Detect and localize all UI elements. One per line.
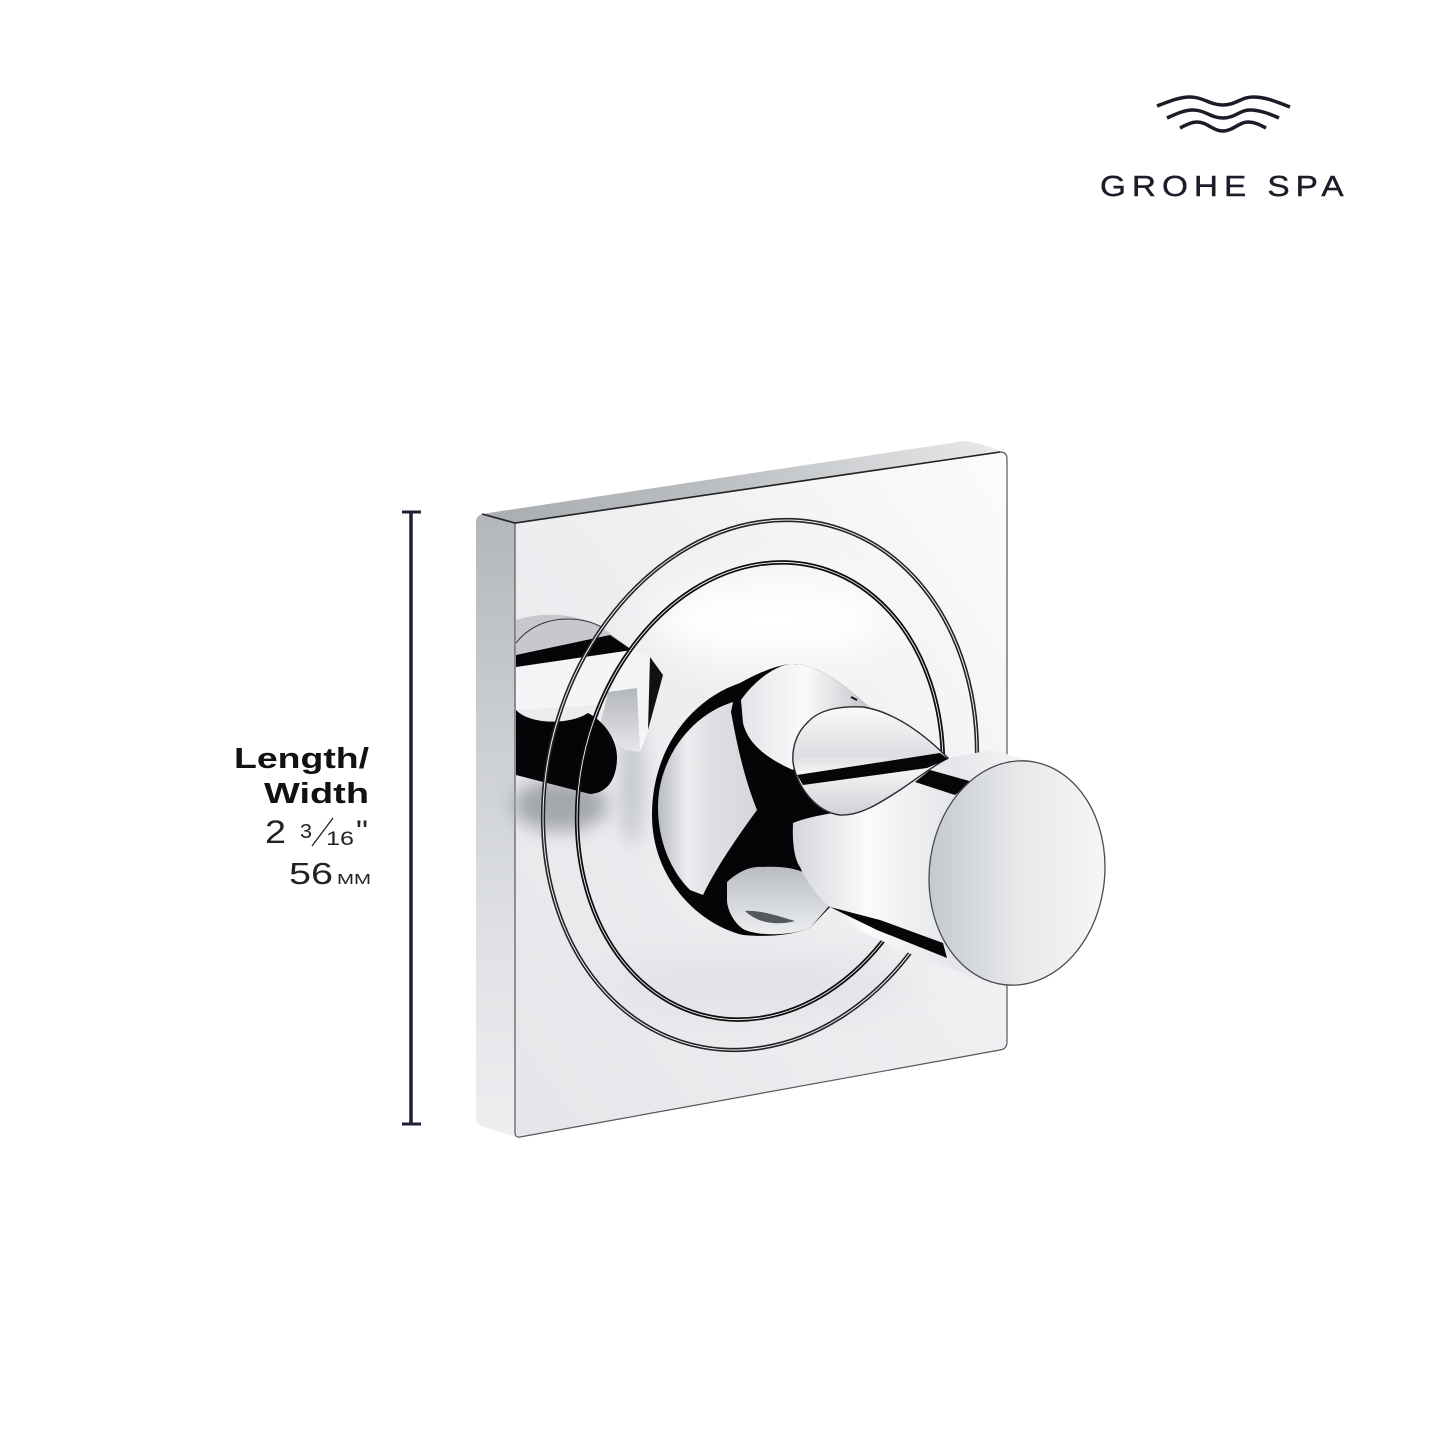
- plate edge highlight lines: [482, 452, 1000, 523]
- hub: [652, 664, 880, 936]
- teardrop collar: [793, 707, 948, 815]
- cylinder dark bands: [830, 770, 973, 958]
- plate front face: [515, 452, 1007, 1137]
- dimension label: length and width: [234, 743, 371, 891]
- dimension line: [402, 511, 421, 1125]
- cap end: [929, 755, 1105, 991]
- imperial value: [265, 814, 368, 850]
- metric value: MM: [337, 871, 371, 888]
- imperial value: 2: [265, 814, 286, 850]
- icon: three waves: [1157, 97, 1290, 131]
- label heading: Width: [264, 778, 369, 810]
- cylinder body: [793, 750, 1040, 982]
- logo: GROHE SPA: [1100, 97, 1350, 202]
- label heading: Length/: [234, 743, 369, 775]
- plate side and top edges: [476, 514, 515, 1137]
- label heading: [234, 743, 369, 810]
- metric value: [289, 856, 371, 891]
- metric value: 56: [289, 856, 333, 891]
- imperial value: 16: [326, 829, 354, 850]
- soft shading: [512, 580, 910, 1011]
- outer ring: [543, 490, 977, 1080]
- imperial value: 3: [300, 821, 312, 843]
- collar dark band: [797, 753, 948, 785]
- product: chrome wall outlet: [476, 441, 1105, 1137]
- logo wordmark: GROHE SPA: [1100, 170, 1350, 202]
- inner ring: [577, 537, 943, 1045]
- imperial value: ": [356, 815, 368, 848]
- reflection on plate: [516, 615, 663, 794]
